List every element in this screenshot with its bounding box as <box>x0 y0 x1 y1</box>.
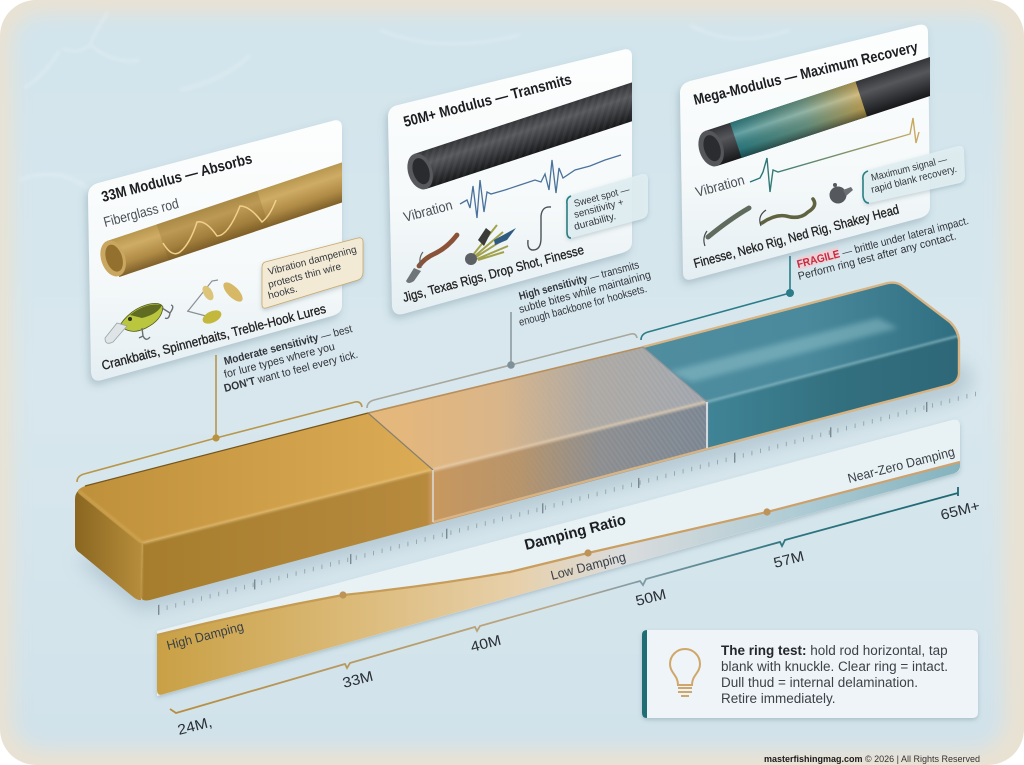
axis label: 33M: 33M <box>341 669 375 692</box>
fiberglass rod <box>100 162 342 277</box>
note: sweet spot: Sweet spot — <box>573 185 631 210</box>
ribbon light panel <box>157 420 960 696</box>
panel: mega-modulus <box>680 25 970 283</box>
card background <box>88 120 342 381</box>
bar shadow <box>75 360 975 612</box>
axis label: 50M: 50M <box>634 587 668 610</box>
carbon rod <box>407 82 632 190</box>
lure list: Crankbaits, Spinnerbaits, Treble-Hook Lures <box>100 301 328 373</box>
icon: texas rig worm <box>406 235 457 283</box>
modulus bar <box>75 283 975 612</box>
icon: jig <box>465 225 516 265</box>
label: near-zero damping: Near-Zero Damping <box>846 444 956 486</box>
sensitivity description <box>518 259 652 329</box>
callout accent bar <box>642 630 647 718</box>
vibration waveform <box>460 155 621 218</box>
curve markers <box>339 508 771 599</box>
axis label: 65M+: 65M+ <box>939 498 982 524</box>
card background <box>680 25 930 280</box>
note: vibration dampening: protects thin wire <box>267 261 343 291</box>
mega-modulus rod <box>698 57 930 166</box>
bar front face <box>141 336 958 600</box>
title: 50M+ Modulus — Transmits <box>402 71 573 131</box>
icon: finesse worm <box>704 208 749 246</box>
callout text: Retire immediately. <box>721 691 836 706</box>
card background <box>388 49 632 314</box>
icon: neko worm <box>760 199 815 226</box>
connector: mega modulus bracket and leader <box>641 256 794 340</box>
icon: light bulb <box>670 649 700 696</box>
axis label: 40M: 40M <box>469 633 503 656</box>
ruler ticks <box>158 394 976 610</box>
panel: 50M+ modulus <box>388 49 654 329</box>
label: high damping: High Damping <box>165 619 245 653</box>
vibration waveform <box>750 118 919 192</box>
vibration label: Vibration <box>694 172 746 200</box>
callout text: blank with knuckle. Clear ring = intact. <box>721 659 948 674</box>
axis label: 24M: 24M, <box>176 715 214 739</box>
note: sweet spot <box>567 174 648 238</box>
bar carbon hatch <box>671 406 706 456</box>
damping ratio ribbon <box>157 420 960 696</box>
axis line <box>170 487 958 713</box>
icon: shakey head <box>830 183 853 204</box>
note: sweet spot: sensitivity + <box>573 197 625 221</box>
sensitivity description: subtle bites while maintaining <box>518 269 652 316</box>
panel: 33M modulus <box>88 120 366 395</box>
label: low damping: Low Damping <box>549 549 627 583</box>
bar top face: gold section <box>78 413 433 543</box>
fragile warning: Perform ring test after any contact. <box>797 230 958 283</box>
sensitivity description: Moderate sensitivity — best <box>223 323 354 368</box>
bar teal highlight <box>668 318 898 382</box>
lure list: Finesse, Neko Rig, Ned Rig, Shakey Head <box>692 202 901 271</box>
note: vibration dampening <box>262 238 363 308</box>
fragile warning: FRAGILE — brittle under lateral impact. <box>796 215 970 271</box>
connector: 33M bracket and leader <box>77 355 362 482</box>
lure list: Jigs, Texas Rigs, Drop Shot, Finesse <box>401 242 585 305</box>
axis label: 57M: 57M <box>772 549 806 572</box>
title: 33M Modulus — Absorbs <box>100 150 254 206</box>
modulus axis <box>170 487 982 739</box>
note: vibration dampening: hooks. <box>267 284 299 302</box>
sensitivity description <box>223 323 359 395</box>
ribbon colored area <box>157 462 960 695</box>
bar top face: transition section <box>368 347 707 470</box>
bar top face: teal section <box>643 283 958 402</box>
callout text: The ring test: hold rod horizontal, tap <box>721 643 948 658</box>
sensitivity description: for lure types where you <box>223 341 336 381</box>
callout: ring test <box>642 630 978 718</box>
label: damping ratio: Damping Ratio <box>523 511 628 554</box>
sensitivity description: enough backbone for hooksets. <box>518 283 648 329</box>
connector: 50M bracket and leader <box>367 312 637 408</box>
callout text <box>721 643 948 706</box>
vibration label: Vibration <box>402 197 454 225</box>
sensitivity description: DON'T want to feel every tick. <box>223 349 359 395</box>
damping curve <box>157 462 960 635</box>
note: sweet spot: durability. <box>573 211 617 233</box>
bar edge highlights <box>79 283 959 598</box>
note: maximum signal: Maximum signal — <box>870 154 948 184</box>
sensitivity description: High sensitivity — transmits <box>518 259 641 303</box>
note: maximum signal: rapid blank recovery. <box>870 164 958 196</box>
callout background <box>642 630 978 718</box>
icon: hook <box>528 207 551 250</box>
vibration wave <box>163 200 276 254</box>
footer credit: masterfishingmag.com © 2026 | All Rights Reserved <box>764 754 980 764</box>
icon: spinnerbait <box>187 279 246 326</box>
title: Mega-Modulus — Maximum Recovery <box>692 39 920 109</box>
icon: crankbait <box>105 303 173 343</box>
bar left face <box>75 491 143 600</box>
note: maximum signal <box>863 146 965 203</box>
subtitle: Fiberglass rod <box>102 195 180 230</box>
note: vibration dampening: Vibration dampening <box>267 244 358 278</box>
callout text: Dull thud = internal delamination. <box>721 675 918 690</box>
